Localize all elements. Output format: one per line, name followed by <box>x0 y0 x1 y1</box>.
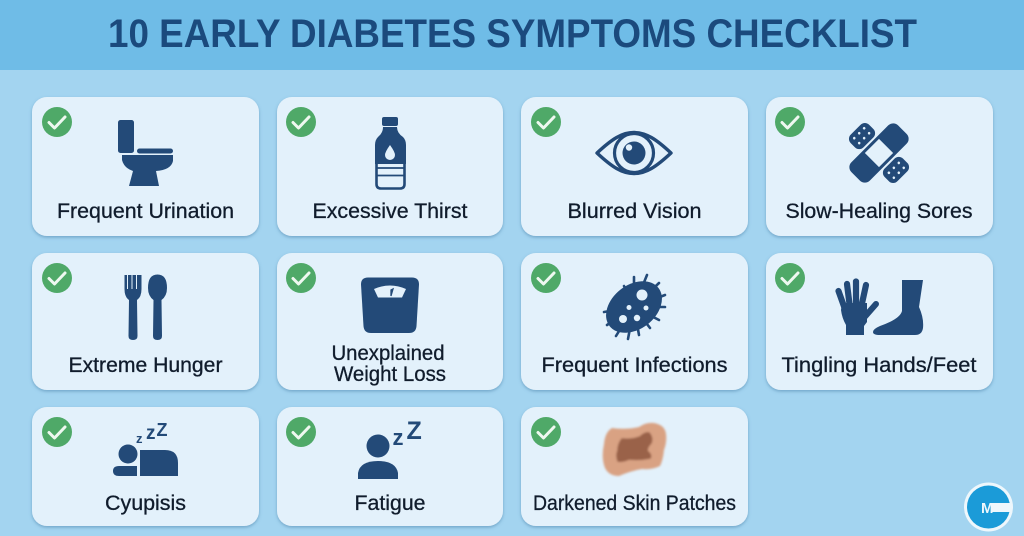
icon: bacterium <box>596 271 672 343</box>
panel: Excessive Thirst <box>277 97 503 236</box>
panel: Blurred Vision <box>521 97 748 236</box>
label: Extreme Hunger <box>68 353 222 377</box>
icon: crossed bandages <box>846 120 912 186</box>
icon: hand and foot <box>838 280 923 335</box>
logo <box>964 482 1013 532</box>
panel: Unexplained Weight Loss <box>277 253 503 390</box>
icon: weighing scale <box>361 278 419 333</box>
label: Tingling Hands/Feet <box>782 353 977 377</box>
panel: Frequent Infections <box>521 253 748 390</box>
label: Fatigue <box>354 491 426 515</box>
label: Frequent Infections <box>542 353 728 377</box>
label: Darkened Skin Patches <box>533 491 736 515</box>
panel: Slow-Healing Sores <box>766 97 993 236</box>
icon: tired person <box>358 417 422 479</box>
icon: eye <box>597 132 671 174</box>
label: Cyupisis <box>105 491 186 515</box>
icon: tired person: Z <box>406 417 422 445</box>
panel: Tingling Hands/Feet <box>766 253 993 390</box>
label: Slow-Healing Sores <box>786 199 972 223</box>
panel: Fatigue <box>277 407 503 526</box>
panel: Cyupisis <box>32 407 259 526</box>
icon: sleeping person <box>113 420 178 476</box>
panel: Frequent Urination <box>32 97 259 236</box>
panel: Unexplained Weight Loss: Weight Loss <box>334 362 446 386</box>
icon: water bottle <box>375 117 406 188</box>
label: Excessive Thirst <box>312 199 468 223</box>
label: Frequent Urination <box>57 199 234 223</box>
icon: dark skin patch <box>603 423 666 476</box>
label: Blurred Vision <box>568 199 702 223</box>
label: Unexplained <box>332 341 444 365</box>
icon: sleeping person: z <box>136 431 143 446</box>
icon: tired person: z <box>392 425 404 450</box>
panel: Darkened Skin Patches <box>521 407 748 526</box>
header band <box>0 0 1024 70</box>
icon: toilet <box>118 120 173 186</box>
icon: fork and spoon <box>124 274 167 340</box>
panel: Extreme Hunger <box>32 253 259 390</box>
icon: sleeping person: z <box>146 423 156 444</box>
logo: M <box>981 500 994 517</box>
icon: sleeping person: Z <box>156 420 168 440</box>
title: 10 EARLY DIABETES SYMPTOMS CHECKLIST <box>108 12 917 56</box>
